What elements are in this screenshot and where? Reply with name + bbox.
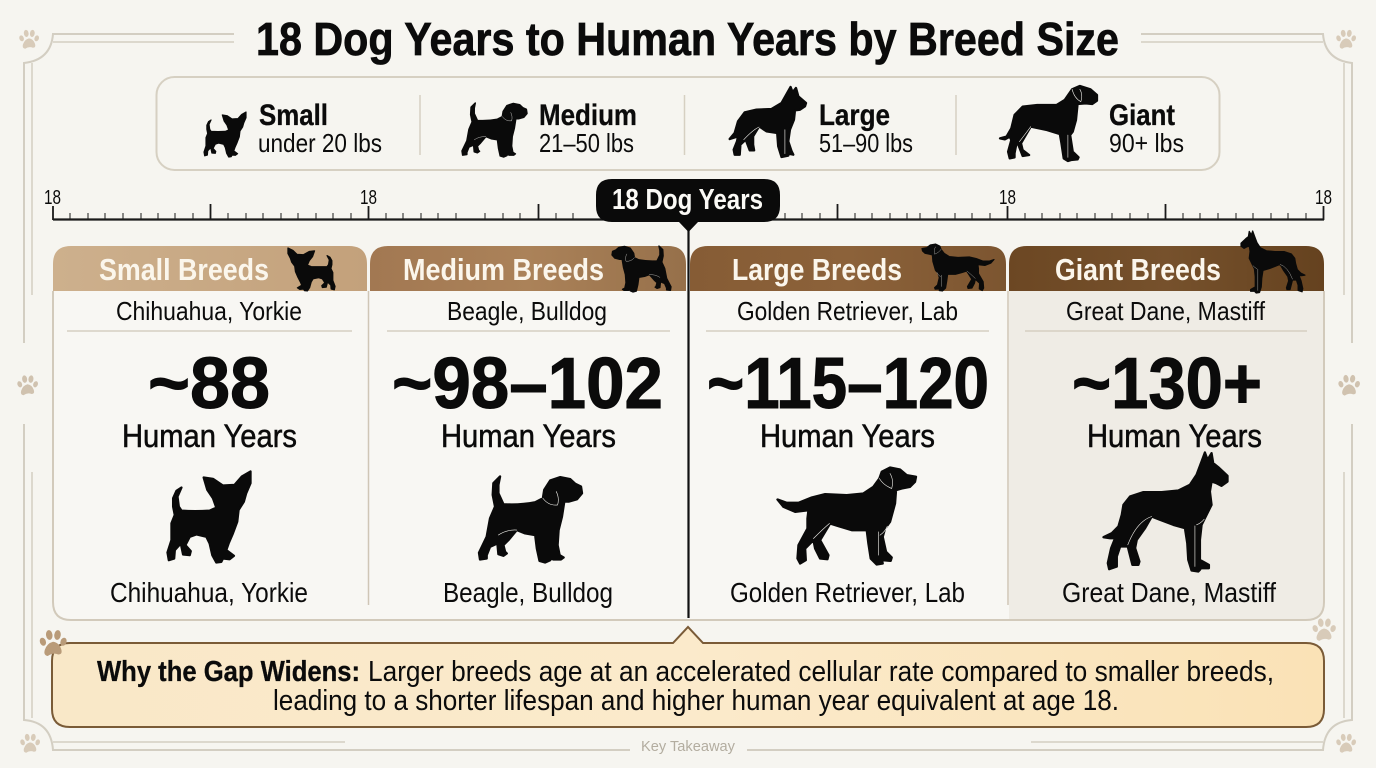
icon: callout paw left — [39, 630, 68, 656]
timeline ruler: 18 — [999, 187, 1016, 209]
legend item: large: 51–90 lbs — [819, 128, 913, 158]
legend item: small: Small — [259, 99, 328, 132]
legend item: giant — [1000, 86, 1184, 161]
footer label: key takeaway: Key Takeaway — [641, 738, 735, 755]
timeline ruler — [44, 187, 1332, 220]
card: medium breeds: ~98–102 — [392, 344, 663, 424]
card: large breeds — [690, 244, 1006, 608]
callout: why the gap widens: leading to a shorter lifespan and higher human year equivalent at age 18. — [273, 685, 1119, 717]
card: giant breeds: Giant Breeds — [1055, 252, 1221, 287]
marker line: 18 dog years — [687, 222, 690, 618]
card: small breeds: Chihuahua, Yorkie — [116, 296, 302, 326]
icon: corner paw top right — [1335, 30, 1357, 49]
card: medium breeds: Human Years — [441, 418, 616, 454]
card: giant breeds — [1009, 231, 1324, 608]
card: large breeds: Golden Retriever, Lab — [730, 577, 965, 608]
panel: breed cards — [53, 231, 1324, 620]
callout: why the gap widens: Why the Gap Widens: — [97, 656, 360, 688]
legend item: medium — [462, 99, 637, 158]
timeline ruler: 18 — [1315, 187, 1332, 209]
legend item: large: Large — [819, 99, 890, 132]
card: giant breeds: ~130+ — [1072, 344, 1262, 424]
legend item: medium: 21–50 lbs — [539, 128, 634, 158]
title: 18 Dog Years to Human Years by Breed Size — [256, 13, 1119, 65]
legend item: large — [730, 87, 913, 158]
icon: corner paw bottom left — [19, 734, 41, 753]
icon: corner paw bottom right — [1335, 734, 1357, 753]
icon: corner paw top left — [18, 30, 40, 49]
marker pill: 18 Dog Years — [596, 179, 780, 232]
legend item: small — [204, 99, 382, 158]
card: small breeds: Chihuahua, Yorkie — [110, 577, 308, 608]
giant card tint — [1009, 291, 1323, 620]
card: large breeds: ~115–120 — [707, 344, 989, 424]
card: small breeds — [53, 246, 367, 608]
legend item: small: under 20 lbs — [258, 128, 382, 158]
legend item: medium: Medium — [539, 99, 637, 132]
card: large breeds: Human Years — [760, 418, 935, 454]
timeline ruler: 18 — [360, 187, 377, 209]
panel: size legend — [156, 77, 1220, 170]
marker pill: 18 Dog Years: 18 Dog Years — [612, 184, 763, 216]
card: small breeds: Small Breeds — [99, 252, 269, 287]
card: large breeds: Large Breeds — [732, 252, 902, 287]
card: medium breeds: Beagle, Bulldog — [447, 296, 607, 326]
legend item: giant: 90+ lbs — [1109, 128, 1184, 158]
card: small breeds: Human Years — [122, 418, 297, 454]
timeline ruler: 18 — [44, 187, 61, 209]
callout: why the gap widens: Larger breeds age at an accelerated cellular rate compared to smaller breeds, — [368, 656, 1274, 688]
card: giant breeds: Great Dane, Mastiff — [1066, 296, 1266, 326]
card: giant breeds: Human Years — [1087, 418, 1262, 454]
card: medium breeds — [370, 246, 686, 608]
icon: side paw left — [16, 375, 39, 395]
icon: side paw right — [1338, 375, 1361, 396]
card: large breeds: Golden Retriever, Lab — [737, 296, 958, 326]
card: small breeds: ~88 — [148, 344, 270, 424]
callout: why the gap widens — [52, 627, 1324, 727]
legend item: giant: Giant — [1109, 99, 1175, 132]
icon: callout paw right — [1312, 618, 1337, 641]
card: giant breeds: Great Dane, Mastiff — [1062, 577, 1276, 608]
card: medium breeds: Medium Breeds — [403, 252, 604, 287]
card: medium breeds: Beagle, Bulldog — [443, 577, 613, 608]
